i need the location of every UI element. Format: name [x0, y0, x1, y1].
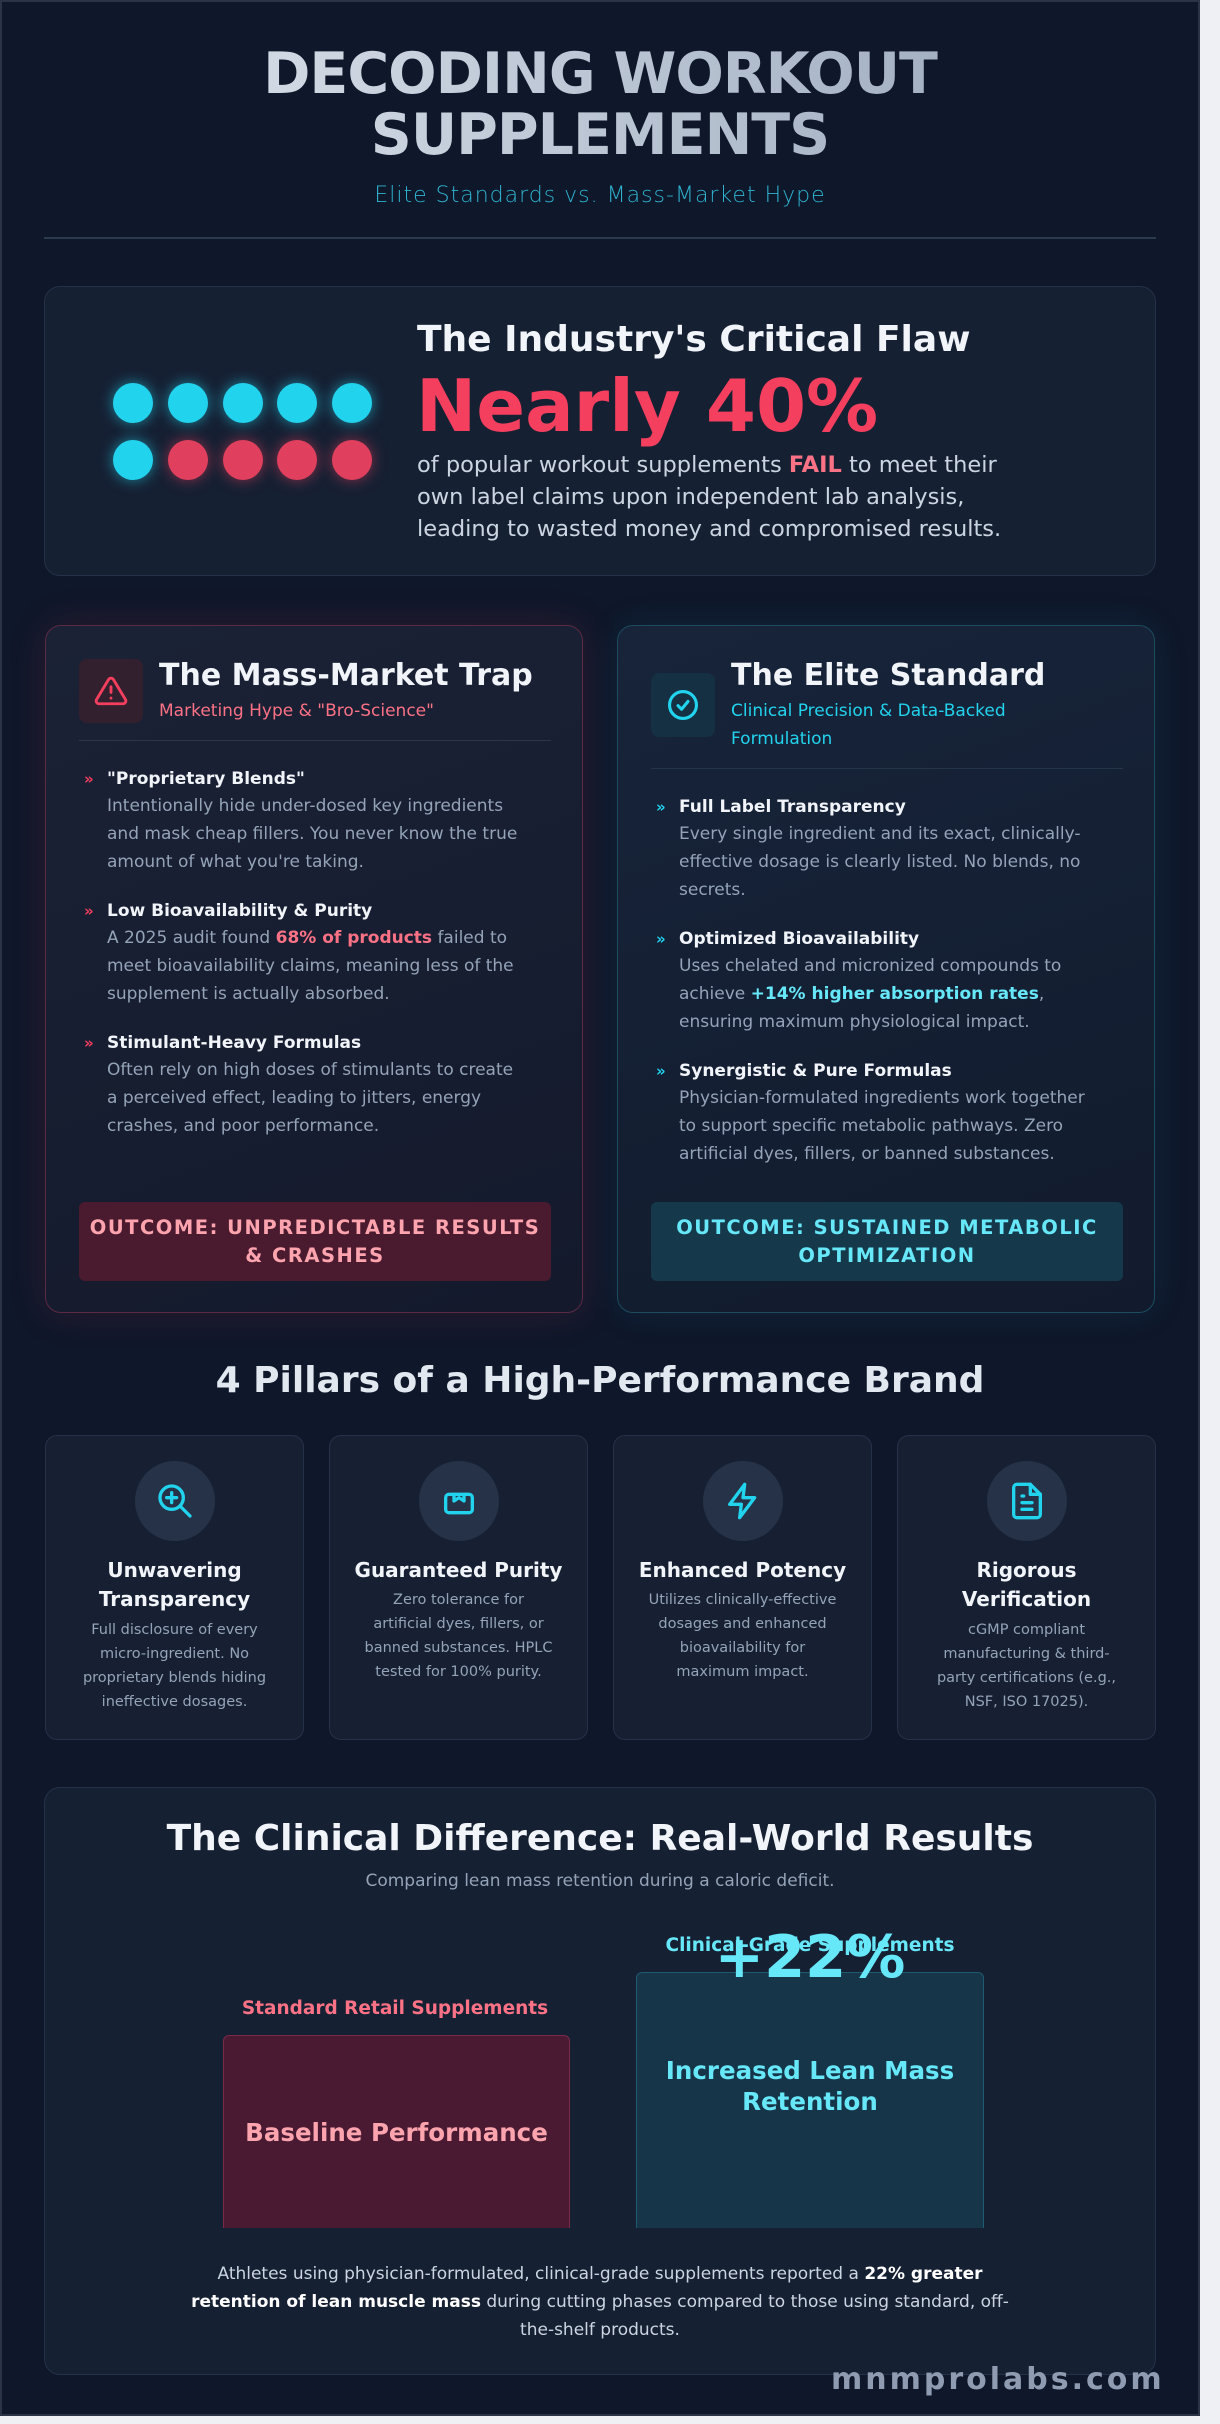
panel: elite standard: » [656, 930, 666, 948]
heading: The Industry's Critical Flaw [417, 319, 970, 360]
item: low bioavailability [84, 901, 514, 1004]
icon: dot grid 40% [104, 374, 381, 488]
callout: outcome: OUTCOME: UNPREDICTABLE RESULTS [90, 1216, 540, 1238]
icon: magnifier [135, 1461, 215, 1541]
item: synergistic: Physician-formulated ingredients work together to support specific metabolic pathways. Zero artificial dyes, fillers, or banned substances. [679, 1088, 1085, 1164]
icon: document [987, 1461, 1067, 1541]
panel: elite standard [617, 625, 1155, 1313]
panel: pillar transparency: Unwavering Transparency [99, 1558, 250, 1611]
stat: nearly 40%: Nearly 40% [416, 364, 878, 448]
item: synergistic: Synergistic & Pure Formulas [679, 1061, 952, 1081]
bar: standard [223, 2035, 570, 2228]
item: optimized bioavailability: Optimized Bioavailability [679, 929, 919, 949]
icon: lightning [703, 1461, 783, 1541]
panel: mass-market trap: » [84, 770, 94, 788]
panel: pillar purity: Guaranteed Purity [355, 1558, 562, 1582]
callout: outcome: OPTIMIZATION [798, 1244, 976, 1266]
callout: outcome [79, 1202, 551, 1281]
item: stimulant-heavy: Often rely on high doses of stimulants to create a perceived effect, leading to jitters, energy crashes, and poor performance. [107, 1060, 513, 1136]
item: proprietary blends: Intentionally hide under-dosed key ingredients and mask cheap fillers. You never know the true amount of what you're taking. [107, 796, 517, 872]
panel: clinical difference [44, 1787, 1156, 2375]
icon: warning [79, 659, 143, 723]
callout: outcome [651, 1202, 1123, 1281]
panel: mass-market trap [45, 625, 583, 1313]
title [2, 44, 1198, 166]
panel: pillar verification: Rigorous Verification [962, 1558, 1091, 1611]
text block: of popular workout supplements FAIL to meet their own label claims upon independent lab analysis, leading to wasted money and compromised results. [417, 452, 1001, 542]
item: synergistic [656, 1061, 1085, 1164]
bar label: clinical: Clinical-Grade Supplements [666, 1935, 954, 1956]
title: DECODING WORKOUT [263, 41, 937, 107]
item: optimized bioavailability [656, 929, 1061, 1032]
panel: critical flaw stat [44, 286, 1156, 576]
watermark: mnmprolabs.com [831, 2362, 1165, 2397]
item: stimulant-heavy [84, 1033, 513, 1136]
subheading: Marketing Hype & "Bro-Science" [159, 701, 434, 721]
panel: pillar transparency [45, 1435, 304, 1740]
bar: standard: Baseline Performance [245, 2118, 548, 2146]
panel: pillar purity: Zero tolerance for artificial dyes, fillers, or banned substances. HPLC tested for 100% purity. [364, 1592, 552, 1680]
item: proprietary blends [84, 769, 517, 872]
icon: purity box [419, 1461, 499, 1541]
panel: mass-market trap: » [84, 902, 94, 920]
bar: clinical [636, 1972, 984, 2228]
heading: The Clinical Difference: Real-World Results [167, 1818, 1033, 1859]
bar chart [223, 1922, 984, 2228]
heading: 4 pillars: 4 Pillars of a High-Performance Brand [216, 1360, 984, 1401]
panel: pillar potency [613, 1435, 872, 1740]
item: optimized bioavailability: Uses chelated and micronized compounds to achieve +14% higher absorption rates, ensuring maximum physiological impact. [679, 956, 1061, 1032]
callout: outcome: OUTCOME: SUSTAINED METABOLIC [676, 1216, 1098, 1238]
item: full label transparency [656, 797, 1081, 900]
item: stimulant-heavy: Stimulant-Heavy Formulas [107, 1033, 361, 1053]
panel: pillar transparency: Full disclosure of every micro-ingredient. No proprietary blends hiding ineffective dosages. [83, 1622, 266, 1710]
subtitle: Elite Standards vs. Mass-Market Hype [374, 183, 826, 208]
panel: pillar verification: cGMP compliant manufacturing & third-party certifications (e.g., NSF, ISO 17025). [937, 1622, 1116, 1710]
item: proprietary blends: "Proprietary Blends" [107, 769, 305, 789]
item: full label transparency: Every single ingredient and its exact, clinically-effective dosage is clearly listed. No blends, no secrets. [679, 824, 1081, 900]
icon: check circle [651, 673, 715, 737]
item: full label transparency: Full Label Transparency [679, 797, 906, 817]
subheading: Clinical Precision & Data-Backed Formulation [731, 701, 1006, 749]
panel: pillar potency: Enhanced Potency [639, 1558, 846, 1582]
item: low bioavailability: Low Bioavailability & Purity [107, 901, 372, 921]
panel: elite standard: » [656, 798, 666, 816]
title: SUPPLEMENTS [371, 102, 829, 168]
text block: footnote: Athletes using physician-formulated, clinical-grade supplements reported a 22% greater retention of lean muscle mass during cutting phases compared to those using standard, off-the-shelf products. [191, 2264, 1009, 2340]
heading: The Mass-Market Trap [159, 658, 533, 693]
stat: +22%: +22% [715, 1922, 905, 1991]
bar label: standard: Standard Retail Supplements [242, 1998, 548, 2019]
heading: The Elite Standard [731, 658, 1045, 693]
callout: outcome: & CRASHES [245, 1244, 385, 1266]
panel: elite standard: » [656, 1062, 666, 1080]
item: low bioavailability: A 2025 audit found 68% of products failed to meet bioavailability claims, meaning less of the supplement is actually absorbed. [107, 928, 514, 1004]
bar: clinical: Increased Lean Mass [666, 2056, 954, 2085]
subheading: Comparing lean mass retention during a caloric deficit. [365, 1871, 835, 1891]
bar: clinical: Retention [742, 2087, 878, 2116]
panel: mass-market trap: » [84, 1034, 94, 1052]
panel: pillar purity [329, 1435, 588, 1740]
panel: pillar verification [897, 1435, 1156, 1740]
panel: pillar potency: Utilizes clinically-effective dosages and enhanced bioavailability for maximum impact. [649, 1592, 836, 1680]
